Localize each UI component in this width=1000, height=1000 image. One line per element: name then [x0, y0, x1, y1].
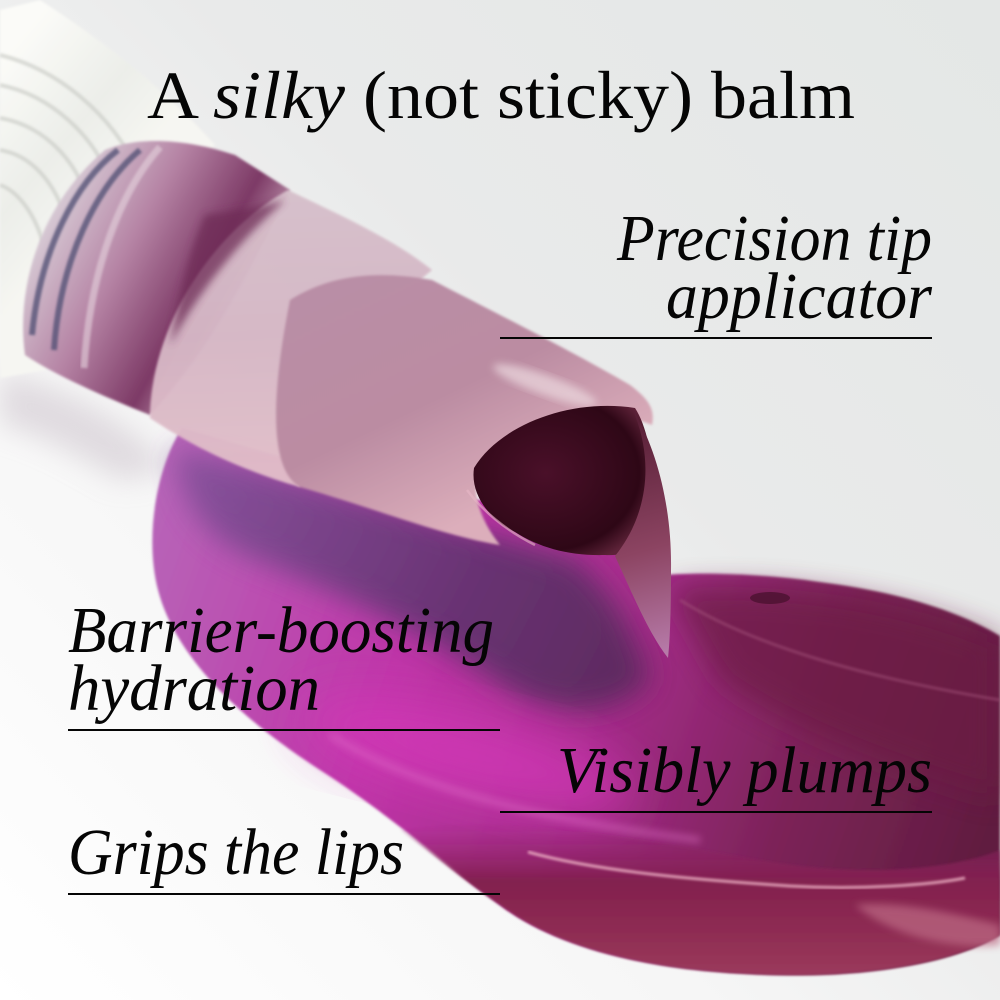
threaded neck	[23, 141, 290, 415]
lower glossy reflection	[855, 904, 1000, 946]
dark right side of puddle	[670, 587, 1000, 800]
puddle body	[152, 428, 1000, 975]
shadow of tube on puddle	[175, 450, 650, 710]
dripping strand	[615, 408, 671, 658]
gloss	[467, 490, 535, 545]
tip highlight	[490, 357, 600, 413]
title: A silky (not sticky) balm	[147, 57, 855, 133]
label: grips the lips: Grips the lips	[68, 816, 404, 889]
label: precision tip applicator	[500, 202, 932, 339]
rim highlight	[528, 852, 965, 887]
balm puddle	[152, 428, 1000, 975]
soft tube shadow on surface	[0, 372, 170, 480]
tube	[0, 0, 653, 545]
label: barrier-boosting hydration	[68, 594, 500, 731]
inner dark reflection	[170, 200, 285, 345]
bright magenta glow	[295, 675, 645, 835]
balm drop at tip	[467, 406, 671, 658]
applicator tip	[276, 275, 653, 545]
label: visibly plumps: Visibly plumps	[557, 734, 932, 807]
dark balm mass	[473, 406, 654, 555]
label: barrier-boosting hydration: hydration	[68, 652, 320, 725]
surface bubbles	[750, 592, 790, 604]
label: precision tip applicator: applicator	[666, 260, 932, 333]
label: precision tip applicator: Precision tip	[616, 202, 932, 275]
thick lower rim	[400, 825, 1000, 975]
frosted collar	[150, 190, 432, 487]
surface ripples	[680, 600, 1000, 700]
label: barrier-boosting hydration: Barrier-boosting	[68, 594, 494, 667]
white ribbed cap	[0, 0, 215, 378]
upper curved sheen	[330, 735, 700, 840]
